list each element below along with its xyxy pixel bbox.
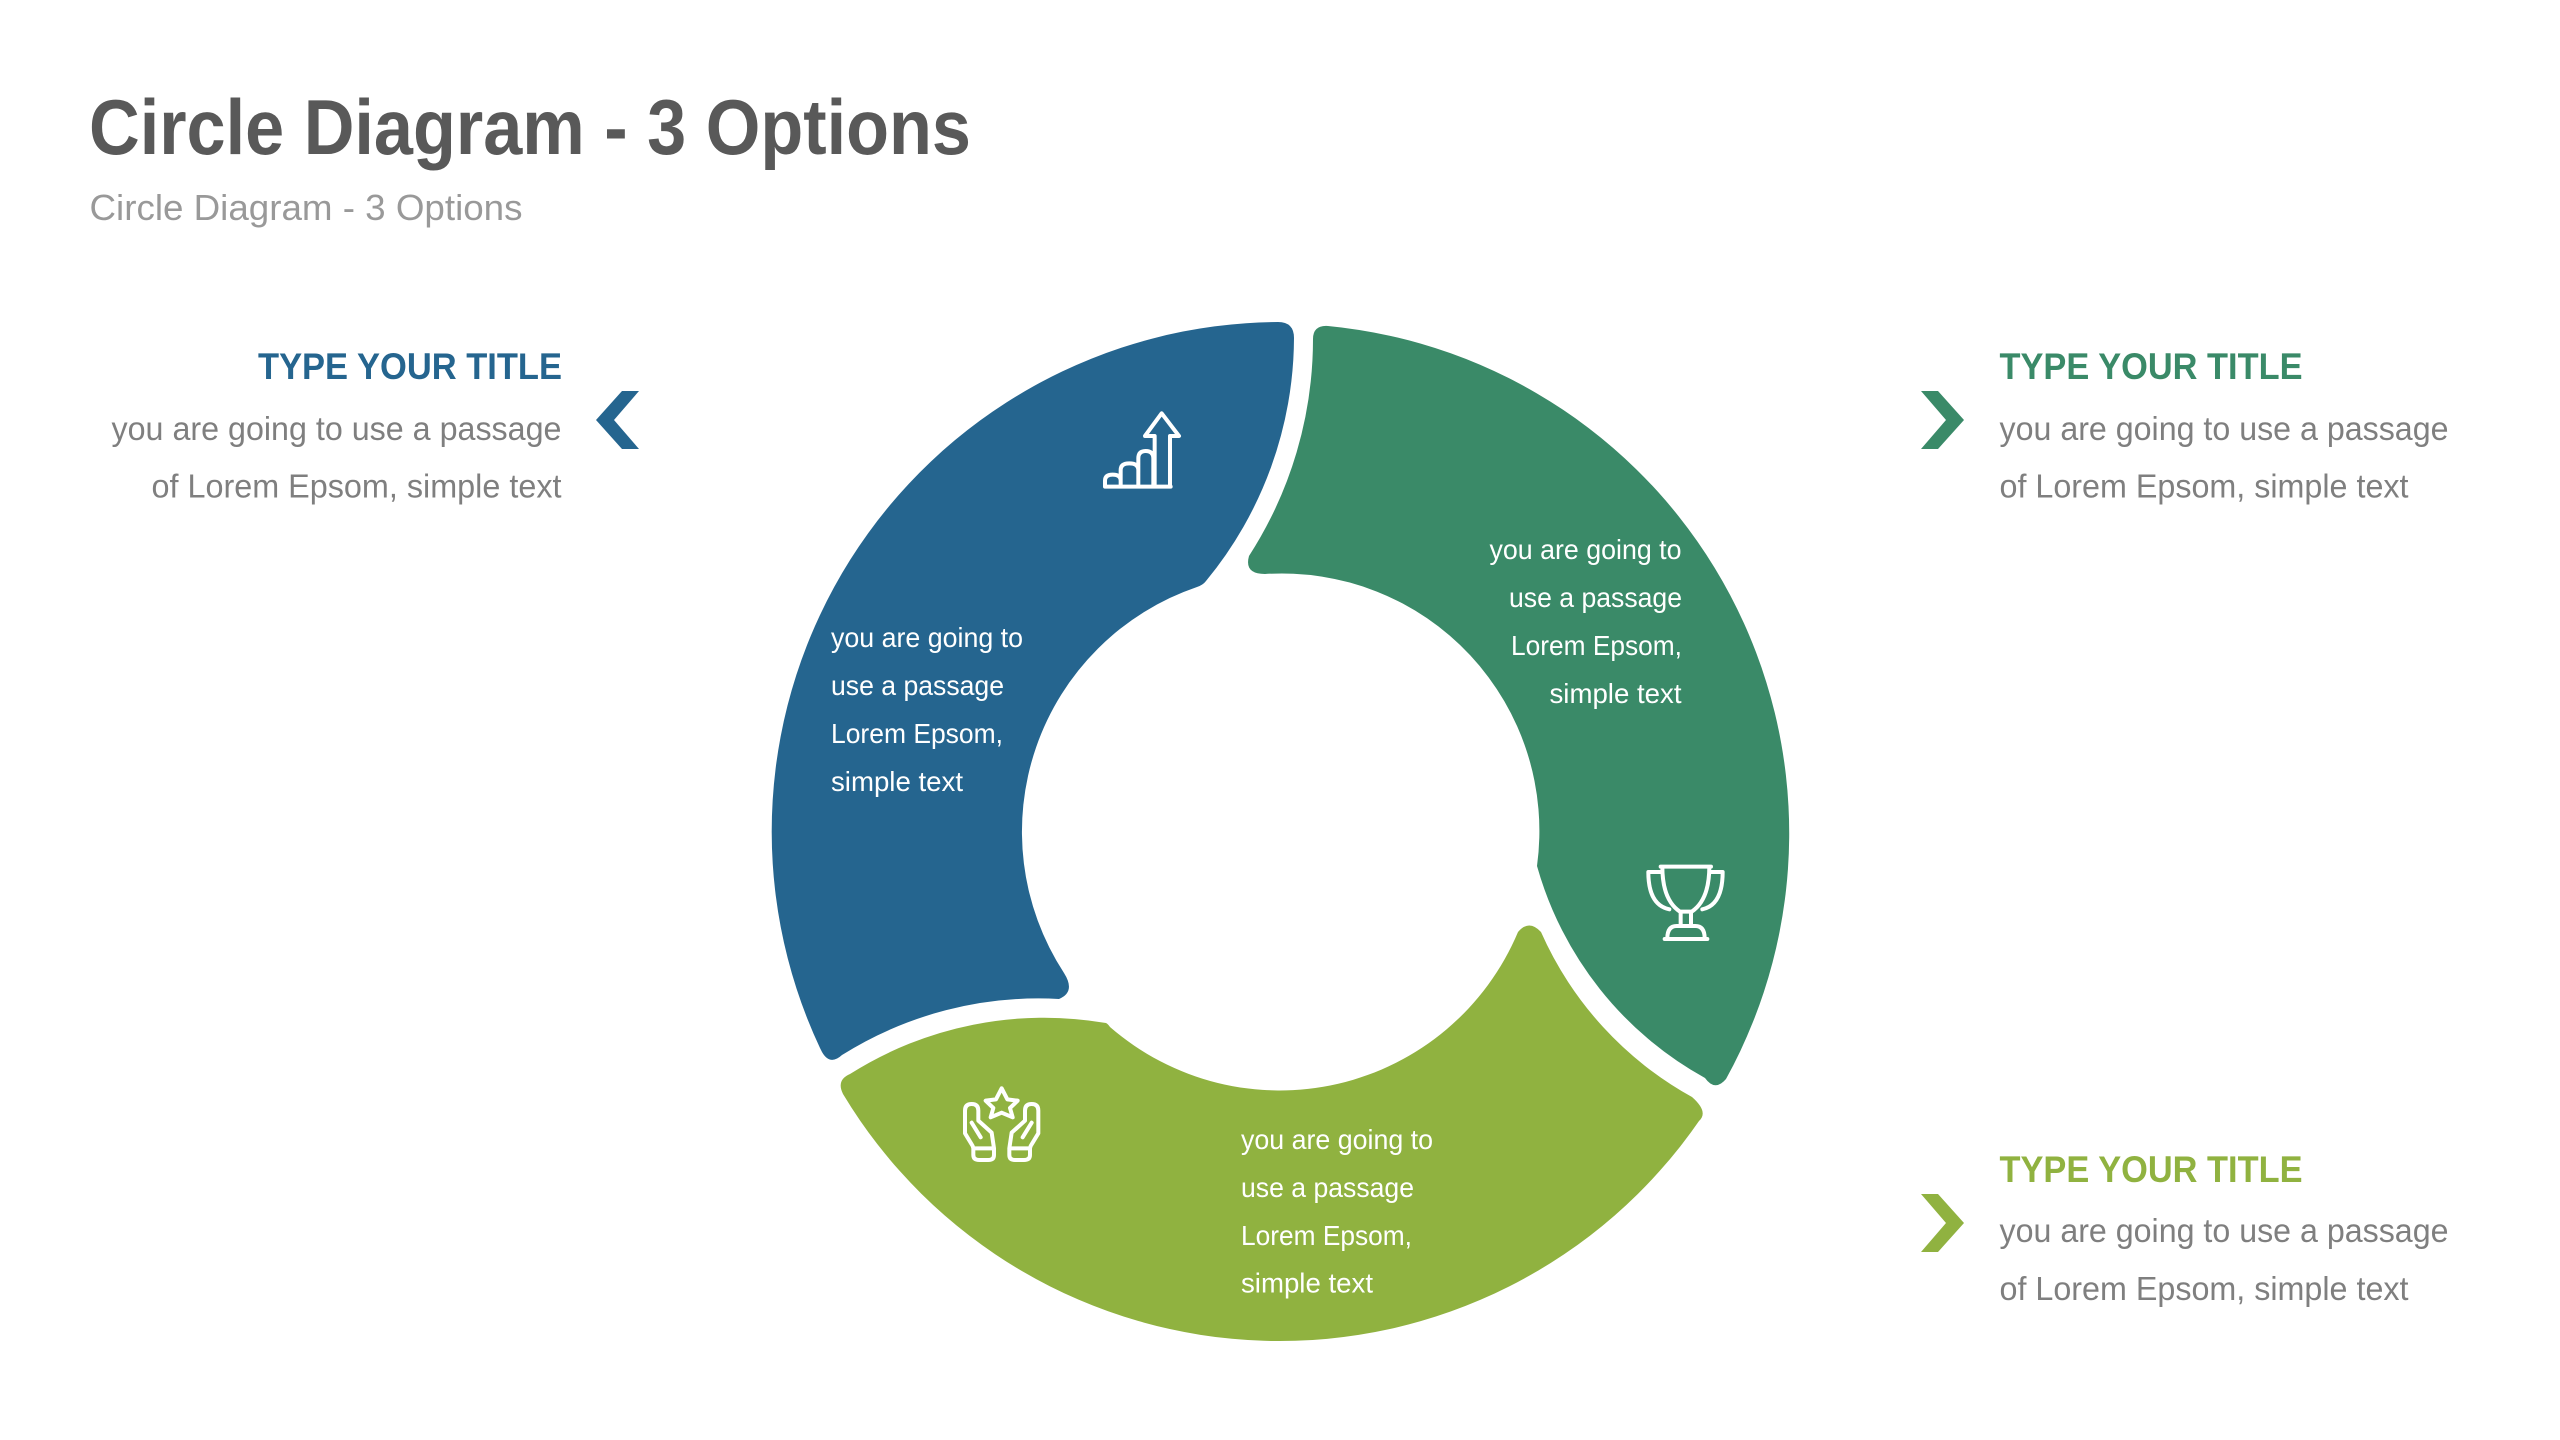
segment: blue bbox=[772, 322, 1294, 1060]
subtitle: Circle Diagram - 3 Options bbox=[90, 187, 522, 228]
text block: olive segment bbox=[1241, 1124, 1433, 1298]
panel: lower right option text bbox=[2000, 1149, 2448, 1307]
text block: green segment: simple text bbox=[1550, 678, 1682, 709]
lower right body line 2: of Lorem Epsom, simple text bbox=[2000, 1270, 2408, 1307]
arrow: upper right green chevron bbox=[1921, 391, 1964, 449]
upper right body line 1: you are going to use a passage bbox=[2000, 410, 2448, 447]
text block: green segment bbox=[1490, 534, 1682, 709]
left option body line 2: of Lorem Epsom, simple text bbox=[152, 468, 562, 504]
text block: olive segment: you are going to bbox=[1241, 1124, 1433, 1155]
upper right heading: TYPE YOUR TITLE bbox=[2000, 346, 2302, 387]
lower right heading: TYPE YOUR TITLE bbox=[2000, 1149, 2302, 1190]
text block: olive segment: simple text bbox=[1241, 1268, 1373, 1298]
chart: circle diagram bbox=[772, 322, 1789, 1341]
arrow: lower right olive chevron bbox=[1921, 1194, 1964, 1252]
text block: green segment: Lorem Epsom, bbox=[1511, 630, 1682, 661]
arrow: left blue chevron bbox=[596, 391, 639, 449]
left option body line 1: you are going to use a passage bbox=[112, 410, 562, 447]
text block: green segment: use a passage bbox=[1509, 582, 1682, 613]
text block: blue segment: use a passage bbox=[831, 670, 1004, 701]
panel: left option text bbox=[112, 346, 562, 504]
left option heading: TYPE YOUR TITLE bbox=[258, 346, 562, 387]
text block: green segment: you are going to bbox=[1490, 534, 1682, 565]
lower right body line 1: you are going to use a passage bbox=[2000, 1212, 2448, 1249]
icon: rising bar chart with arrow bbox=[1105, 413, 1179, 487]
segment: green bbox=[1248, 326, 1789, 1085]
upper right body line 2: of Lorem Epsom, simple text bbox=[2000, 468, 2408, 504]
text block: blue segment: Lorem Epsom, bbox=[831, 718, 1003, 749]
text block: blue segment: simple text bbox=[831, 766, 963, 797]
text block: olive segment: use a passage bbox=[1241, 1172, 1414, 1203]
text block: blue segment bbox=[831, 622, 1023, 797]
panel: upper right option text bbox=[2000, 346, 2448, 504]
title: Circle Diagram - 3 Options bbox=[89, 83, 971, 171]
text block: olive segment: Lorem Epsom, bbox=[1241, 1220, 1412, 1251]
text block: blue segment: you are going to bbox=[831, 622, 1023, 653]
segment: olive bbox=[841, 926, 1703, 1341]
icon: trophy bbox=[1648, 867, 1723, 939]
icon: hands holding a star bbox=[965, 1088, 1038, 1160]
